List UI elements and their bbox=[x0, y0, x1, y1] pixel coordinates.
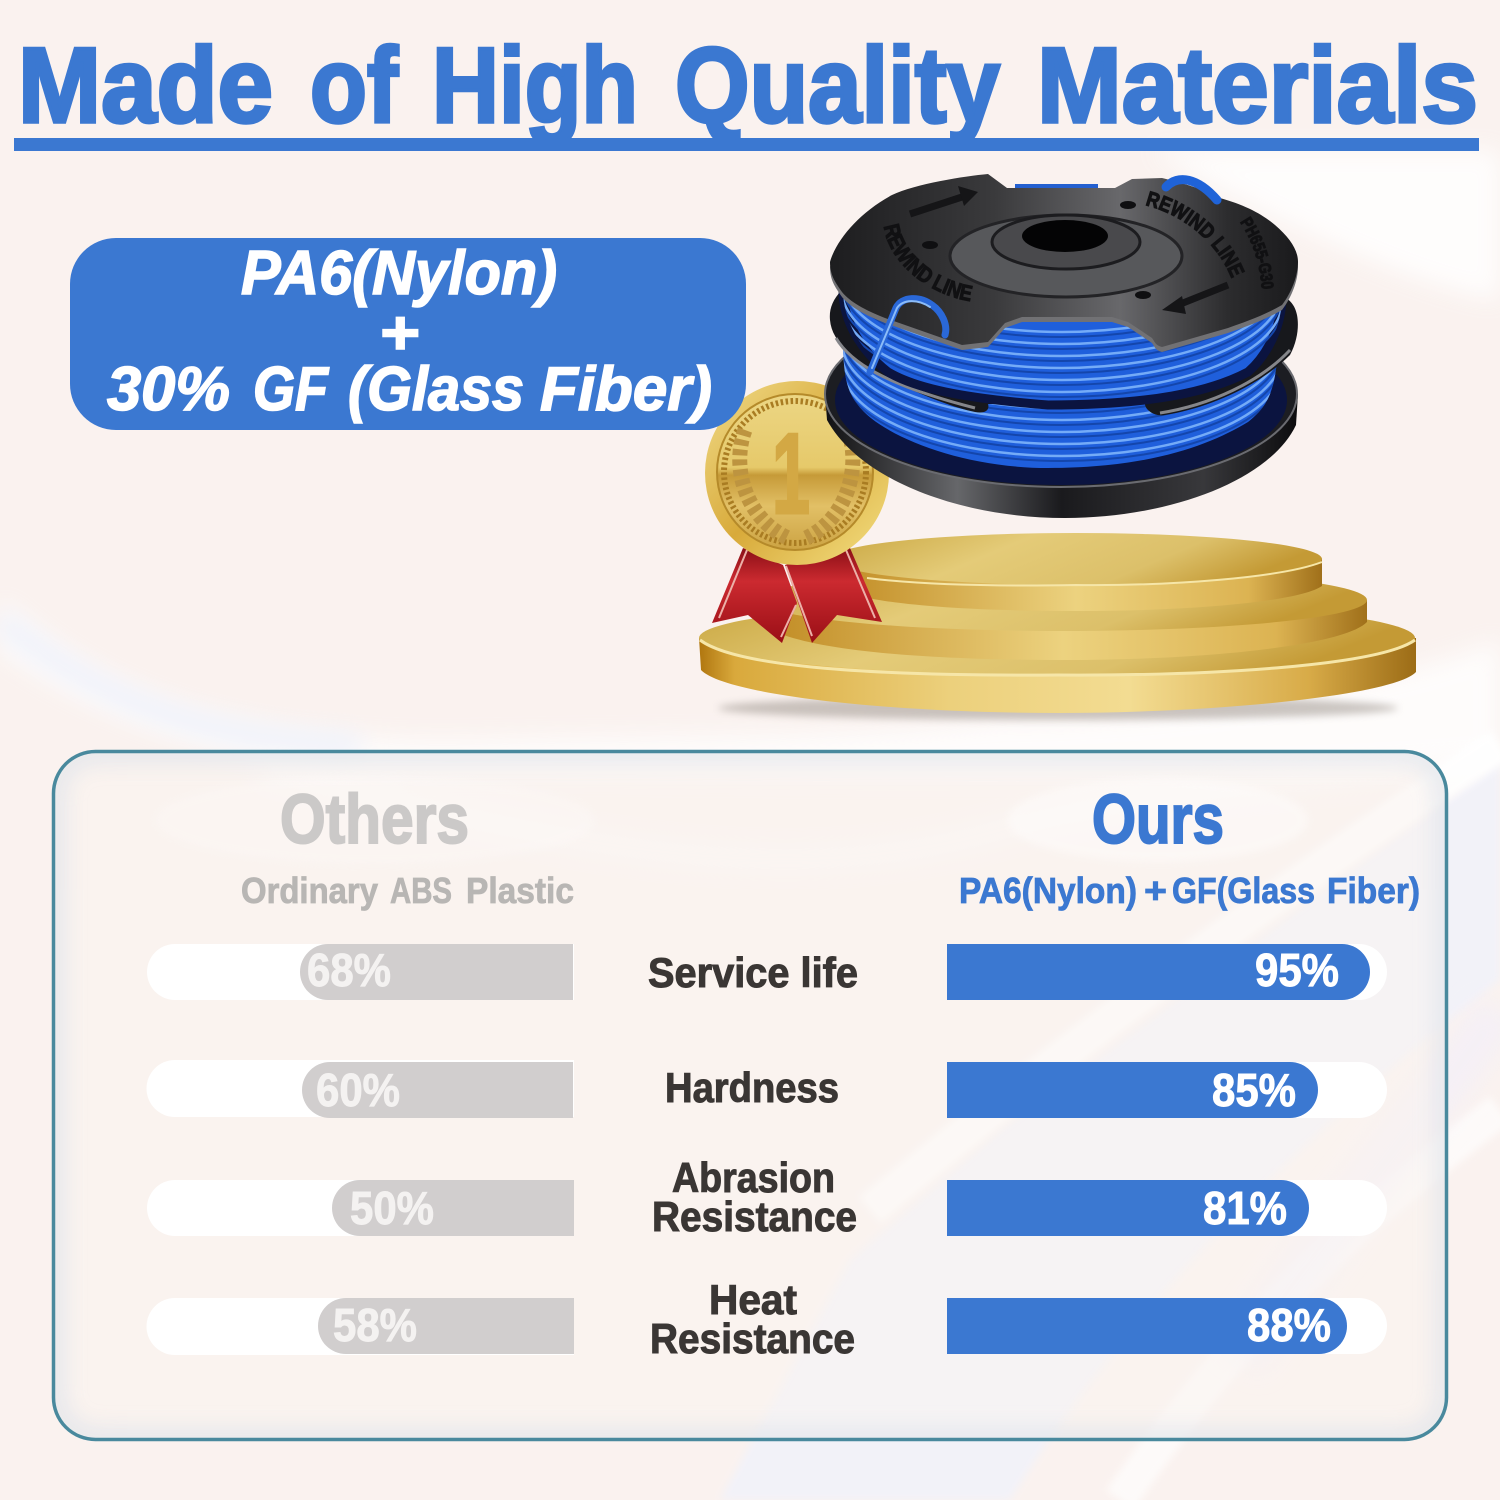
podium bbox=[699, 533, 1416, 720]
title: Made bbox=[18, 25, 273, 145]
heading: ours: GF(Glass bbox=[1172, 870, 1315, 911]
heading: ours: Fiber) bbox=[1327, 870, 1420, 911]
spool upper line winding bbox=[838, 292, 1286, 410]
panel: material composition pill: 30% bbox=[107, 355, 230, 424]
heading: ours: PA6(Nylon) bbox=[959, 870, 1137, 911]
heading: others: Ordinary bbox=[241, 870, 378, 911]
spool top plate: REWIND LINE bbox=[884, 223, 973, 302]
bar: ours service life 95% bbox=[947, 944, 1387, 1000]
label: heat resistance: Heat bbox=[709, 1276, 797, 1323]
title bbox=[14, 25, 1479, 151]
bar: others service life 68%: 68% bbox=[307, 944, 391, 996]
bar: others heat resistance 58% bbox=[146, 1298, 574, 1355]
spool bottom flange bbox=[825, 301, 1298, 518]
panel: material composition pill: GF bbox=[253, 355, 330, 424]
heading: others: Plastic bbox=[466, 870, 574, 911]
bar: ours service life 95%: 95% bbox=[1255, 944, 1339, 996]
spool wire hooks bbox=[870, 180, 1217, 372]
panel: material composition pill: (Glass bbox=[348, 355, 524, 424]
bar: ours abrasion resistance 81% bbox=[947, 1180, 1387, 1236]
panel: material composition pill: + bbox=[379, 299, 419, 368]
bar: ours abrasion resistance 81%: 81% bbox=[1203, 1182, 1287, 1234]
label: heat resistance bbox=[650, 1276, 855, 1362]
title: of bbox=[310, 25, 398, 145]
label: abrasion resistance bbox=[652, 1154, 857, 1240]
bar: ours hardness 85%: 85% bbox=[1212, 1064, 1296, 1116]
bar: others heat resistance 58%: 58% bbox=[333, 1299, 417, 1351]
heading: ours bbox=[959, 780, 1420, 911]
heading: ours: Ours bbox=[1092, 780, 1224, 858]
label: heat resistance: Resistance bbox=[650, 1315, 855, 1362]
panel: material composition pill bbox=[70, 238, 746, 430]
panel: material composition pill: Fiber) bbox=[540, 355, 712, 424]
label: service life: Service life bbox=[648, 949, 858, 996]
bar: ours hardness 85% bbox=[947, 1062, 1387, 1118]
heading: others bbox=[241, 780, 574, 911]
bar: others service life 68% bbox=[147, 944, 574, 1000]
spool lower line winding bbox=[843, 350, 1276, 468]
panel: material composition pill: PA6(Nylon) bbox=[241, 239, 557, 308]
bar: others hardness 60% bbox=[146, 1060, 574, 1118]
label: hardness: Hardness bbox=[665, 1064, 839, 1111]
spool top plate: PH655-G30 bbox=[1240, 216, 1274, 289]
spool top plate: REWIND LINE bbox=[1146, 190, 1245, 278]
product: trimmer line spool bbox=[824, 174, 1298, 518]
spool middle flange bbox=[830, 290, 1298, 415]
heading: others: ABS bbox=[390, 870, 452, 911]
bar: others hardness 60%: 60% bbox=[316, 1064, 400, 1116]
bar: others abrasion resistance 50%: 50% bbox=[350, 1182, 434, 1234]
bar: ours heat resistance 88% bbox=[947, 1298, 1387, 1354]
panel: comparison table bbox=[54, 752, 1446, 1440]
icon: gold medal with ribbon bbox=[705, 381, 889, 643]
bar: ours heat resistance 88%: 88% bbox=[1247, 1299, 1331, 1351]
spool top plate bbox=[830, 174, 1298, 352]
bar: others abrasion resistance 50% bbox=[147, 1180, 574, 1236]
heading: others: Others bbox=[280, 780, 469, 858]
heading: ours: + bbox=[1144, 870, 1167, 911]
label: abrasion resistance: Abrasion bbox=[672, 1154, 835, 1201]
title: Quality bbox=[675, 25, 1000, 145]
label: abrasion resistance: Resistance bbox=[652, 1193, 857, 1240]
title: High bbox=[432, 25, 638, 145]
icon: gold medal with ribbon: 1 bbox=[772, 411, 810, 538]
title: Materials bbox=[1037, 25, 1478, 145]
